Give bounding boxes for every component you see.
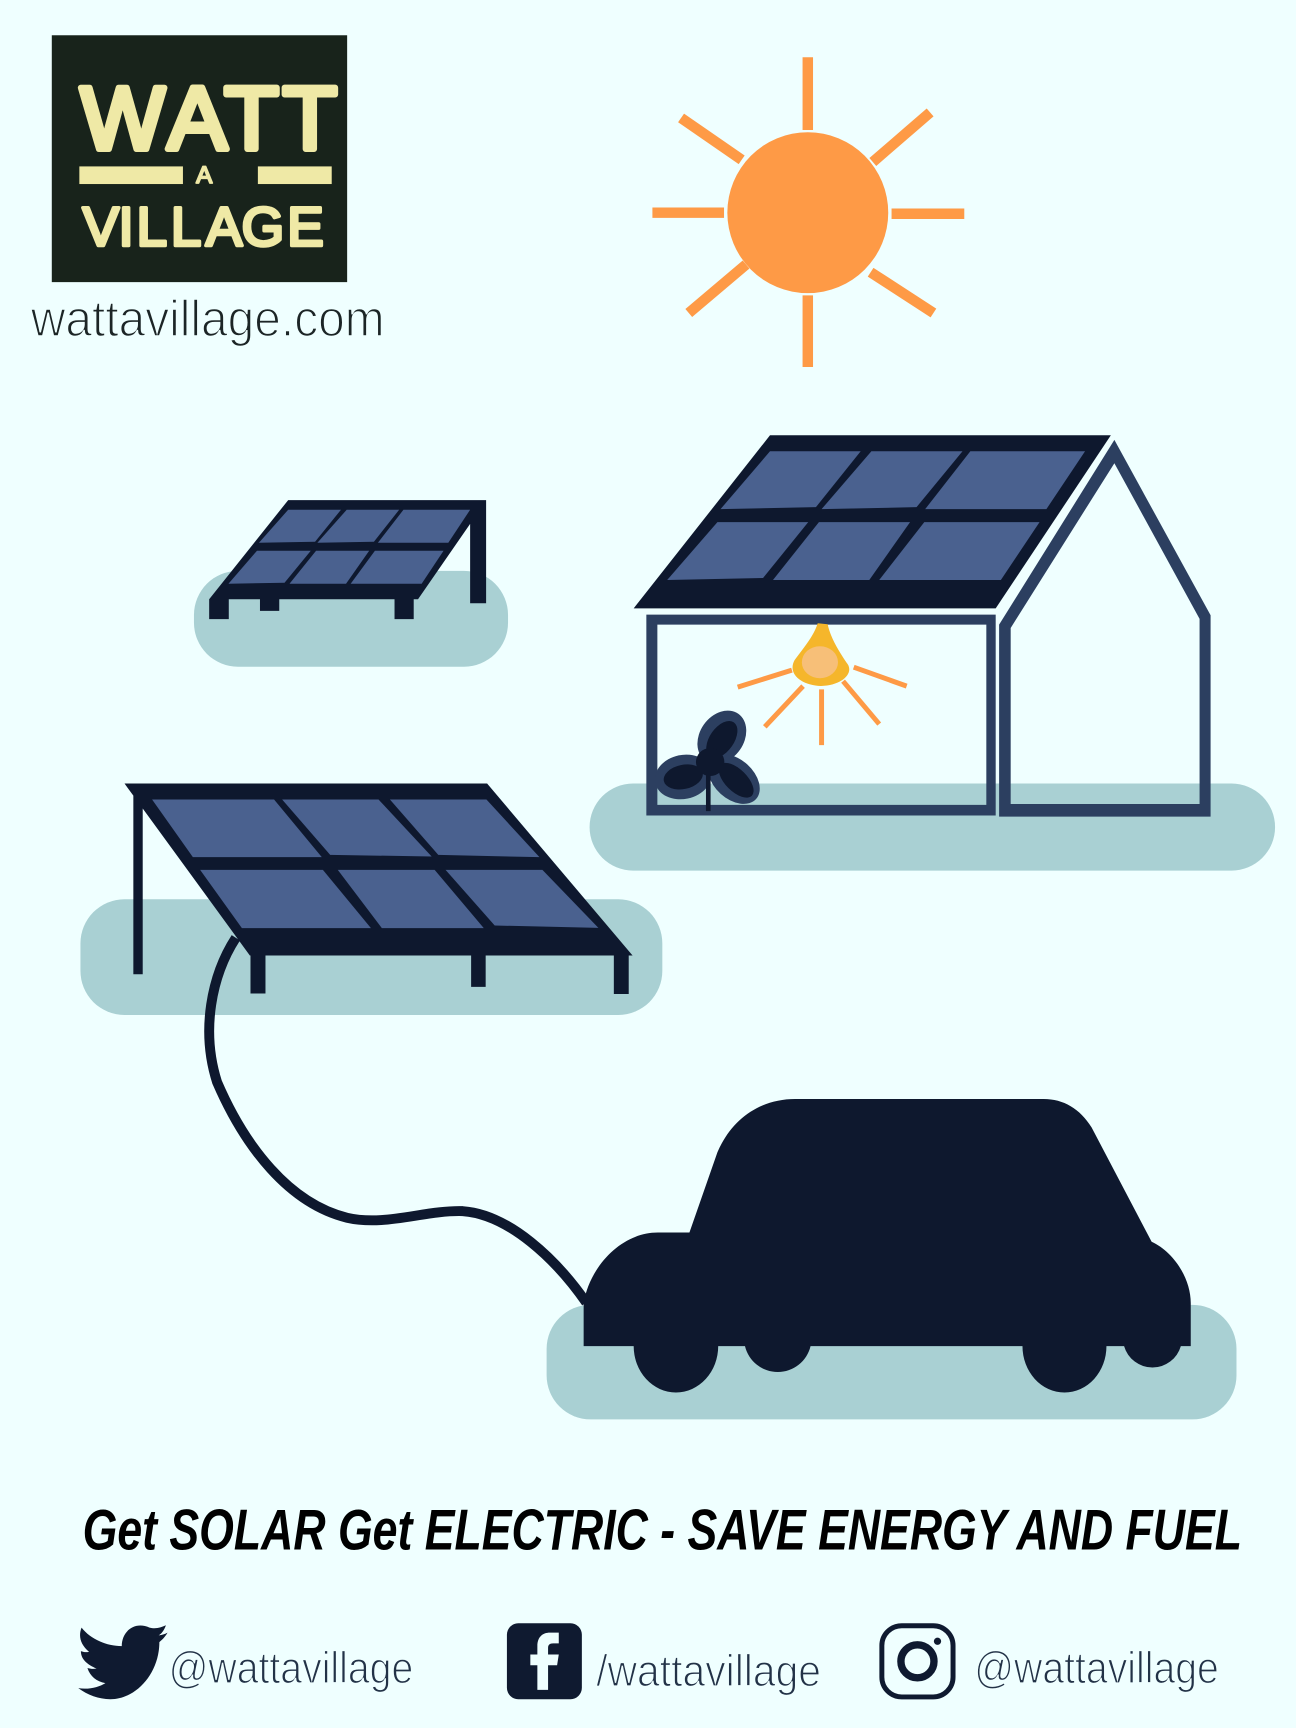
logo: Watt A Village: VILLAGE [83,197,324,258]
electric car [547,1099,1236,1419]
logo: Watt A Village: A [196,162,213,189]
small ground-mounted solar panel [194,500,508,667]
icon: facebook [507,1623,582,1699]
charging cable [209,938,586,1303]
house with rooftop solar panel [590,435,1275,871]
light bulb with rays [738,623,907,745]
twitter handle: @wattavillage [169,1644,413,1693]
fan [651,701,769,814]
icon: instagram [882,1626,953,1697]
house walls [646,440,1211,817]
logo: Watt A Village: WATT [80,68,337,168]
large ground-mounted solar panel [80,784,662,1015]
icon: twitter bird [78,1625,168,1699]
facebook handle: /wattavillage [596,1647,821,1696]
rooftop panel [634,435,1111,608]
logo: Watt A Village [52,35,347,282]
icon: sun [652,57,964,367]
website url: wattavillage.com [30,290,385,347]
instagram handle: @wattavillage [974,1644,1219,1693]
